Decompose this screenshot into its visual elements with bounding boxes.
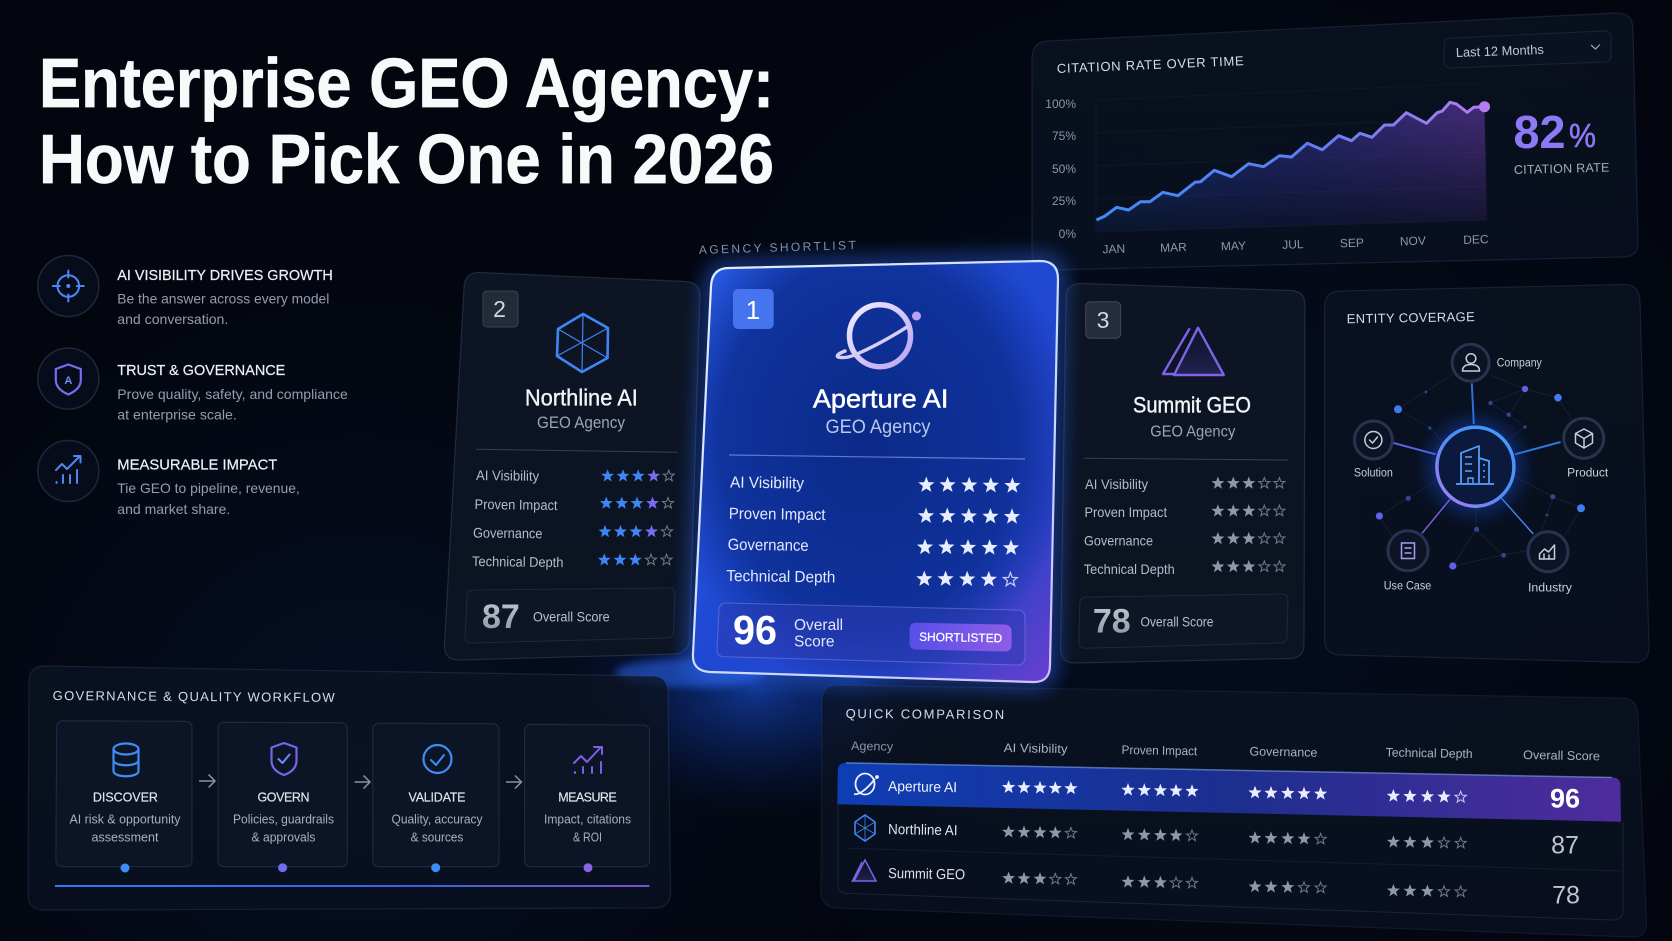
step: discover: DISCOVER xyxy=(93,791,158,805)
network links and dots xyxy=(1376,374,1585,570)
step: validate: Quality, accuracy xyxy=(392,812,483,826)
table header: Overall Score xyxy=(1523,748,1600,763)
overall score: 78 xyxy=(1079,594,1288,648)
row: Aperture AI: 96 xyxy=(1550,784,1580,814)
node: Solution: Solution xyxy=(1354,468,1393,480)
row: Summit GEO xyxy=(852,860,1580,910)
x axis labels: DEC xyxy=(1463,232,1489,247)
arrow xyxy=(199,774,215,788)
line series xyxy=(1096,101,1490,220)
overall score: 87 xyxy=(465,588,675,643)
icon: shield check xyxy=(272,743,296,775)
overall score: 78: 78 xyxy=(1093,603,1131,641)
panel: entity coverage xyxy=(1325,284,1649,663)
node: Solution xyxy=(1354,421,1393,480)
card: Aperture AI (highlighted): Aperture AI xyxy=(813,384,948,414)
icon: target xyxy=(53,270,84,302)
rating: Technical Depth: Technical Depth xyxy=(726,568,835,587)
rating: AI Visibility xyxy=(730,475,1020,493)
rating: AI Visibility xyxy=(476,467,674,484)
feature: trust and governance: at enterprise scale. xyxy=(117,407,237,423)
citation rate stat: % xyxy=(1569,117,1596,154)
citation rate stat: 82 xyxy=(1514,106,1566,158)
row: Aperture AI xyxy=(837,763,1621,822)
rank badge 1: 1 xyxy=(746,295,760,325)
card: Summit GEO: GEO Agency xyxy=(1150,424,1235,441)
node: Industry xyxy=(1528,532,1572,594)
title: How to Pick One in 2026 xyxy=(39,120,774,198)
title xyxy=(39,44,774,198)
node: Product xyxy=(1564,418,1609,480)
step: measure: MEASURE xyxy=(558,791,617,805)
rank badge 2: 2 xyxy=(493,296,506,322)
x axis labels: JUL xyxy=(1282,237,1304,252)
rating: Proven Impact xyxy=(474,496,673,513)
icon: rising chart xyxy=(56,456,80,483)
overall score: 87: Overall Score xyxy=(533,609,610,625)
feature: measurable impact: and market share. xyxy=(117,501,230,517)
row: Aperture AI: Aperture AI xyxy=(888,779,957,796)
logo: Aperture orbit xyxy=(837,305,921,367)
x axis labels: JAN xyxy=(1102,242,1125,256)
step: discover: AI risk & opportunity xyxy=(70,812,181,826)
overall score: 78: Overall Score xyxy=(1140,614,1214,630)
table header: Proven Impact xyxy=(1121,743,1198,758)
feature: AI visibility drives growth: AI VISIBILITY DRIVES GROWTH xyxy=(117,268,333,284)
table header: AI Visibility xyxy=(1004,741,1069,756)
overall score: 96: 96 xyxy=(733,607,777,653)
node: Industry: Industry xyxy=(1528,582,1572,594)
icon: database xyxy=(114,744,138,776)
row: Summit GEO: 78 xyxy=(1552,882,1580,910)
row: Northline AI: Northline AI xyxy=(888,822,958,839)
row: Northline AI xyxy=(855,815,1579,860)
entity heading: ENTITY COVERAGE xyxy=(1347,309,1475,326)
row: Summit GEO: Summit GEO xyxy=(888,866,965,883)
step: validate: VALIDATE xyxy=(408,791,466,805)
rating: Technical Depth: Technical Depth xyxy=(472,553,564,570)
rating: Governance xyxy=(728,537,1019,555)
node: Use Case xyxy=(1384,531,1431,592)
x axis labels: MAY xyxy=(1221,239,1246,253)
y axis labels: 50% xyxy=(1052,162,1076,176)
step: discover: assessment xyxy=(92,831,159,845)
panel: quick comparison xyxy=(821,685,1647,937)
logo: Northline hexagon xyxy=(557,314,608,372)
rating: Proven Impact: Proven Impact xyxy=(1084,504,1167,520)
feature: AI visibility drives growth xyxy=(38,256,333,327)
icon: building xyxy=(1456,446,1494,484)
logo: Summit triangle xyxy=(1163,328,1224,375)
x axis labels: NOV xyxy=(1400,234,1426,248)
card: Summit GEO: Summit GEO xyxy=(1133,393,1251,418)
rating: AI Visibility xyxy=(1085,476,1285,492)
card: Northline AI: GEO Agency xyxy=(537,414,626,432)
icon: hexagon small xyxy=(855,815,875,841)
step: govern: Policies, guardrails xyxy=(233,812,334,826)
rank badge 2 xyxy=(483,291,518,327)
table header: Governance xyxy=(1249,745,1318,760)
card: Northline AI xyxy=(444,272,700,660)
rating: AI Visibility: AI Visibility xyxy=(476,467,539,484)
x axis labels xyxy=(1102,232,1489,256)
rating: Proven Impact xyxy=(729,506,1020,524)
rating: AI Visibility: AI Visibility xyxy=(1085,476,1148,492)
workflow timeline xyxy=(55,863,650,887)
card: Summit GEO xyxy=(1060,283,1305,663)
feature: measurable impact: MEASURABLE IMPACT xyxy=(117,458,277,474)
rank badge 3 xyxy=(1086,302,1121,338)
rating: Technical Depth xyxy=(1084,560,1285,577)
rating: Proven Impact: Proven Impact xyxy=(474,496,558,513)
rank badge 1 xyxy=(733,289,774,329)
x axis labels: MAR xyxy=(1160,240,1187,255)
overall score: 96: Score xyxy=(794,634,834,651)
icon: shield xyxy=(56,364,81,394)
title: Enterprise GEO Agency: xyxy=(39,44,774,122)
node: Use Case: Use Case xyxy=(1384,580,1431,592)
icon: check circle xyxy=(424,745,452,773)
arrow xyxy=(506,776,522,788)
overall score: 96 xyxy=(717,603,1025,665)
citation rate stat: CITATION RATE xyxy=(1514,161,1610,177)
rating: Technical Depth xyxy=(726,568,1017,587)
step: measure xyxy=(525,724,650,867)
feature: trust and governance xyxy=(38,348,348,423)
badge: shortlisted xyxy=(910,623,1012,652)
rating: Governance xyxy=(1084,532,1285,548)
center hub: building xyxy=(1429,421,1521,513)
y axis labels: 0% xyxy=(1059,227,1076,241)
hub spokes xyxy=(1392,383,1561,534)
rank badge 3: 3 xyxy=(1097,307,1109,333)
node: Company xyxy=(1452,344,1542,381)
badge: shortlisted: SHORTLISTED xyxy=(919,630,1003,645)
table outline xyxy=(838,804,1623,920)
area fill xyxy=(1096,102,1487,232)
overall score: 96: Overall xyxy=(794,617,843,634)
y axis labels xyxy=(1045,97,1076,241)
rating: AI Visibility: AI Visibility xyxy=(730,475,804,493)
card: Northline AI: Northline AI xyxy=(525,385,638,411)
table header: Agency xyxy=(851,739,894,754)
step: measure: & ROI xyxy=(573,831,602,845)
feature: AI visibility drives growth: and conversation. xyxy=(117,311,228,327)
table header: Technical Depth xyxy=(1386,746,1473,761)
node: Company: Company xyxy=(1497,358,1542,370)
rating: Technical Depth xyxy=(472,553,672,570)
table header xyxy=(851,739,1600,763)
panel: citation rate chart xyxy=(1032,13,1638,270)
y axis labels: 100% xyxy=(1045,97,1076,111)
step: govern xyxy=(218,722,347,867)
rating: Proven Impact xyxy=(1084,504,1285,520)
overall score: 87: 87 xyxy=(482,598,520,636)
dropdown: Last 12 Months xyxy=(1456,42,1545,60)
node: Product: Product xyxy=(1567,468,1609,480)
step: discover xyxy=(56,721,192,867)
rating: Technical Depth: Technical Depth xyxy=(1084,561,1175,577)
workflow heading: GOVERNANCE & QUALITY WORKFLOW xyxy=(53,688,335,705)
feature: measurable impact xyxy=(38,440,300,517)
feature: trust and governance: Prove quality, safety, and compliance xyxy=(117,386,348,402)
step: measure: Impact, citations xyxy=(544,812,631,826)
step: govern: GOVERN xyxy=(258,791,310,805)
icon: aperture small xyxy=(854,774,878,794)
rating: Governance: Governance xyxy=(473,525,543,541)
card: Aperture AI (highlighted): GEO Agency xyxy=(826,417,931,438)
y axis labels: 75% xyxy=(1052,129,1076,143)
step: validate xyxy=(373,723,499,867)
feature: AI visibility drives growth: Be the answer across every model xyxy=(117,290,329,306)
rating: Governance: Governance xyxy=(728,537,809,555)
dropdown xyxy=(1444,31,1611,68)
feature: measurable impact: Tie GEO to pipeline, revenue, xyxy=(117,480,300,496)
arrow xyxy=(354,776,370,788)
chart heading: CITATION RATE OVER TIME xyxy=(1056,53,1244,76)
x axis labels: SEP xyxy=(1340,236,1364,250)
citation rate stat xyxy=(1514,106,1610,177)
y axis labels: 25% xyxy=(1052,194,1076,208)
step: govern: & approvals xyxy=(252,831,316,845)
step: validate: & sources xyxy=(411,831,463,845)
row: Northline AI: 87 xyxy=(1551,832,1579,860)
card: Aperture AI (highlighted) xyxy=(663,190,1073,690)
icon: measure chart xyxy=(574,747,602,773)
feature: trust and governance: TRUST & GOVERNANCE xyxy=(117,363,286,379)
label: agency shortlist: AGENCY SHORTLIST xyxy=(699,238,857,257)
comparison heading: QUICK COMPARISON xyxy=(846,706,1004,722)
rating: Proven Impact: Proven Impact xyxy=(729,506,826,524)
panel: governance and quality workflow xyxy=(28,666,671,910)
icon: triangle small xyxy=(852,860,876,882)
rating: Governance: Governance xyxy=(1084,532,1153,548)
rating: Governance xyxy=(473,525,672,541)
icon: shield: A xyxy=(64,375,72,387)
